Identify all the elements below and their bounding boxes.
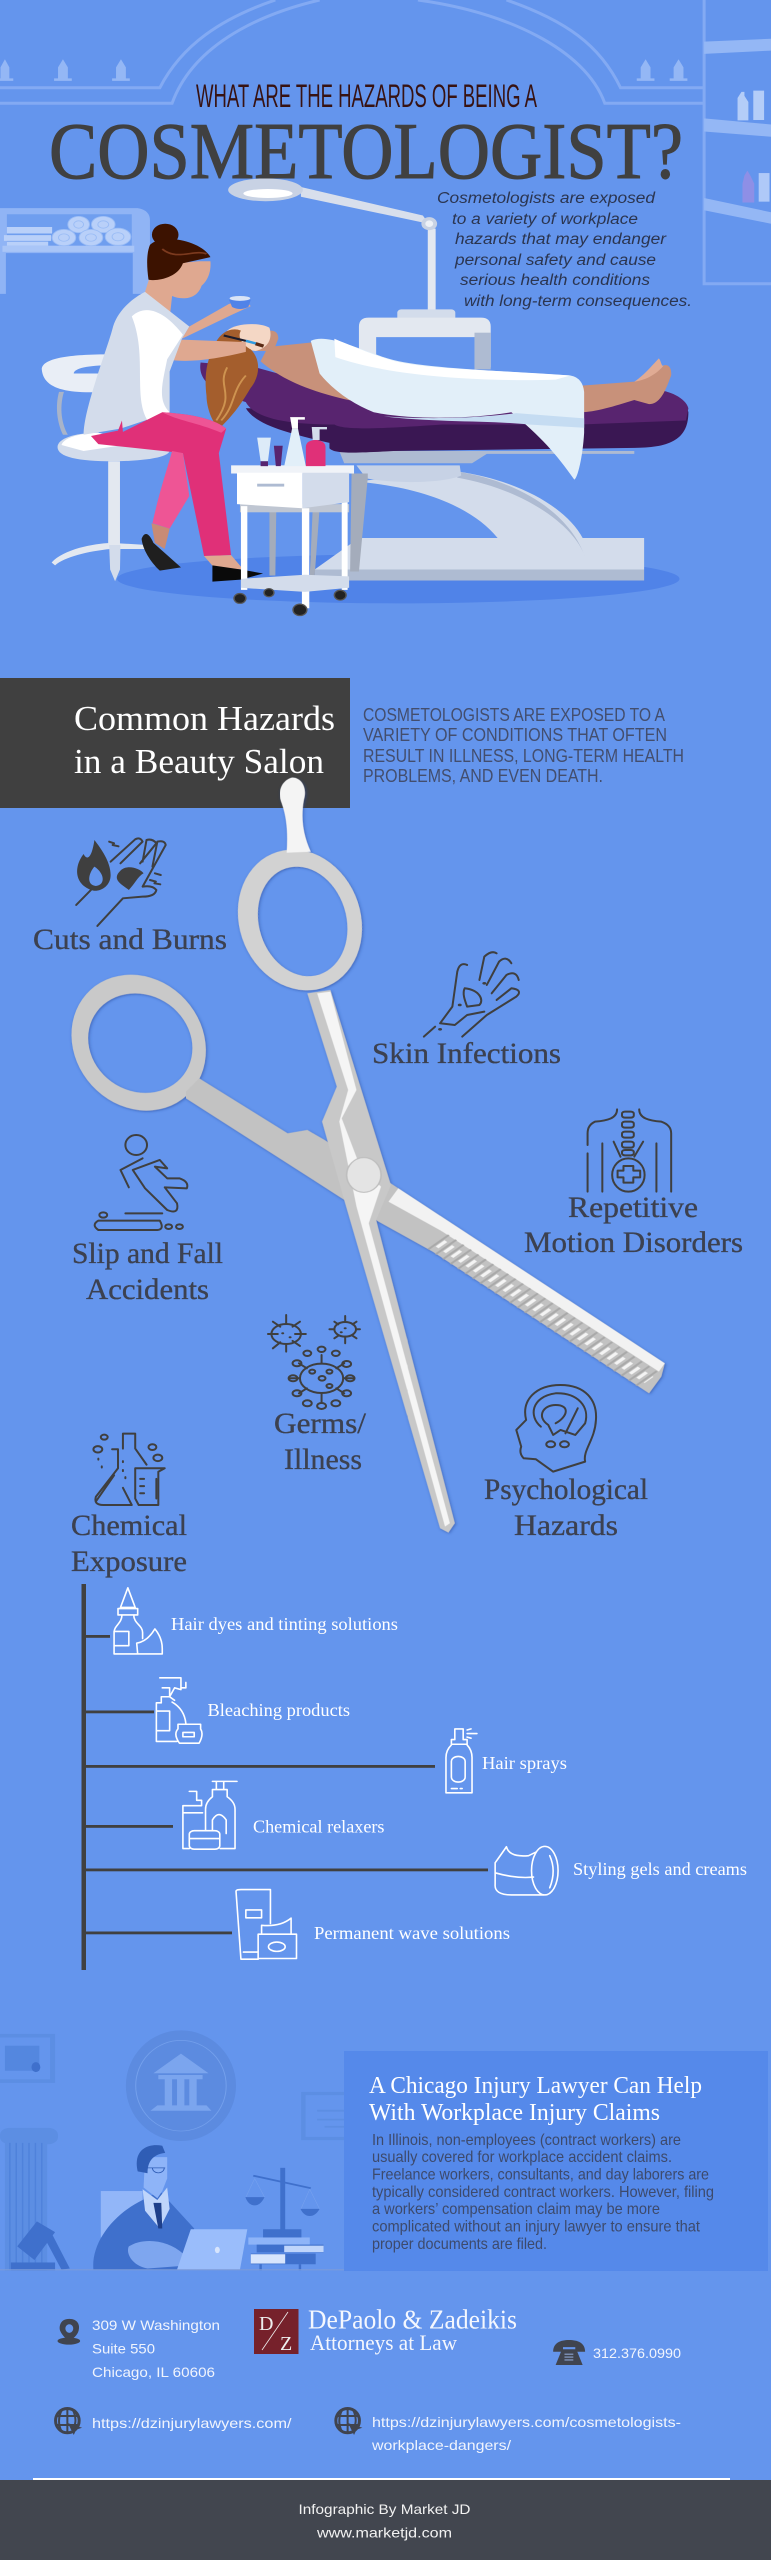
stool [42, 354, 170, 581]
label: germs and illness: Illness [284, 1443, 362, 1476]
thinning blade and ring [59, 969, 665, 1393]
label: cuts and burns: Cuts and Burns [33, 923, 227, 956]
icon: spray can [446, 1729, 477, 1793]
label: Chemical relaxers [253, 1816, 384, 1836]
hero illustration: salon scene [0, 0, 771, 616]
label: psychological hazards: Hazards [514, 1509, 618, 1542]
label: repetitive motion disorders: Motion Disorders [524, 1226, 743, 1259]
address: 309 W Washington [92, 2317, 220, 2333]
website link: https://dzinjurylawyers.com/ [92, 2415, 292, 2431]
straight blade and ring [228, 777, 455, 1533]
callout panel: injury lawyer: A Chicago Injury Lawyer Can Help [369, 2073, 702, 2099]
hazard icon: cuts and burns [76, 838, 166, 926]
intro text: Cosmetologists are exposed [437, 190, 657, 207]
label: Permanent wave solutions [314, 1923, 510, 1943]
label: skin infections: Skin Infections [372, 1037, 561, 1070]
beautician [84, 224, 263, 582]
law office background [0, 2030, 348, 2271]
section intro text: PROBLEMS, AND EVEN DEATH. [363, 766, 603, 786]
patient [206, 324, 671, 427]
label: Bleaching products [208, 1700, 350, 1720]
callout body: In Illinois, non-employees (contract workers) are [372, 2132, 681, 2149]
intro text [437, 190, 692, 310]
section heading panel: in a Beauty Salon [74, 742, 324, 781]
label: psychological hazards [484, 1473, 648, 1542]
logo: DePaolo & Zadeikis: DePaolo & Zadeikis [308, 2304, 517, 2334]
logo: DePaolo & Zadeikis: D [259, 2313, 273, 2335]
label: repetitive motion disorders: Repetitive [568, 1191, 698, 1224]
callout body: typically considered contract workers. However, filing [372, 2184, 714, 2201]
article link: https://dzinjurylawyers.com/cosmetologists- [372, 2414, 681, 2430]
scales and books [245, 2168, 324, 2270]
hazard icon: psychological head [516, 1385, 596, 1472]
intro text: with long-term consequences. [464, 293, 692, 310]
lamp [228, 178, 455, 321]
label: germs and illness [274, 1407, 367, 1476]
callout body: usually covered for workplace accident claims. [372, 2149, 672, 2166]
chemical tree lines [82, 1584, 488, 1970]
footer [0, 2480, 771, 2560]
intro text: serious health conditions [460, 272, 650, 289]
label: psychological hazards: Psychological [484, 1473, 648, 1506]
icon: pump bottles [183, 1781, 237, 1849]
main title: COSMETOLOGIST? [49, 108, 683, 196]
article link: workplace-dangers/ [371, 2437, 511, 2453]
callout panel: injury lawyer: With Workplace Injury Claims [369, 2100, 660, 2126]
icon: telephone [553, 2340, 585, 2365]
label: slip and fall accidents: Accidents [86, 1273, 209, 1306]
callout panel: injury lawyer [344, 2051, 768, 2271]
salon background architecture [0, 0, 771, 284]
label: slip and fall accidents: Slip and Fall [72, 1237, 223, 1270]
callout body [372, 2132, 714, 2253]
lawyer figure [93, 2145, 247, 2270]
icon: spray bottle and jar [156, 1678, 202, 1743]
address [92, 2317, 220, 2380]
callout body: proper documents are filed. [372, 2236, 547, 2253]
item: styling gels [495, 1846, 747, 1895]
towel drape [311, 339, 584, 480]
label: Hair sprays [482, 1753, 567, 1773]
label: Styling gels and creams [573, 1859, 747, 1879]
lawyer illustration [0, 2030, 348, 2271]
section intro text [363, 705, 684, 786]
icon: dye bottle [114, 1588, 162, 1654]
icon: tube and box [236, 1890, 296, 1959]
address: Chicago, IL 60606 [92, 2364, 215, 2380]
section intro text: COSMETOLOGISTS ARE EXPOSED TO A [363, 705, 665, 725]
icon: cream jar [495, 1846, 558, 1895]
hazard icon: repetitive motion spine [588, 1109, 671, 1192]
hazard icon: germs [268, 1315, 360, 1409]
icon: globe one [56, 2409, 82, 2435]
section heading panel: Common Hazards [74, 699, 335, 738]
label: repetitive motion disorders [524, 1191, 743, 1259]
towel rack [0, 208, 150, 294]
section heading panel [0, 678, 350, 808]
label: chemical exposure: Exposure [71, 1545, 187, 1578]
item: hair sprays [446, 1729, 567, 1793]
callout body: Freelance workers, consultants, and day laborers are [372, 2166, 709, 2184]
small heading: WHAT ARE THE HAZARDS OF BEING A [196, 78, 537, 114]
label: slip and fall accidents [72, 1237, 223, 1306]
section intro text: VARIETY OF CONDITIONS THAT OFTEN [363, 725, 667, 745]
hazard icon: chemical flasks [93, 1434, 165, 1505]
article link [371, 2414, 681, 2453]
phone number: 312.376.0990 [593, 2345, 681, 2361]
scissors [59, 777, 665, 1533]
item: chemical relaxers [183, 1781, 384, 1849]
logo: DePaolo & Zadeikis: Attorneys at Law [310, 2330, 457, 2355]
address: Suite 550 [92, 2340, 155, 2356]
label: chemical exposure [71, 1509, 187, 1578]
callout body: complicated without an injury lawyer to ensure that [372, 2218, 701, 2236]
hazard icon: skin infections [424, 952, 519, 1037]
icon: location pin [58, 2319, 80, 2345]
floor shadow [117, 554, 680, 603]
cart with bottles [231, 417, 368, 616]
item: permanent wave [236, 1890, 510, 1959]
item: bleaching [156, 1678, 350, 1743]
label: Hair dyes and tinting solutions [171, 1614, 398, 1634]
callout body: a workers’ compensation claim may be more [372, 2201, 660, 2218]
label: germs and illness: Germs/ [274, 1407, 367, 1440]
item: hair dyes [114, 1588, 398, 1654]
icon: globe two [336, 2409, 362, 2435]
intro text: hazards that may endanger [455, 231, 667, 248]
footer: www.marketjd.com [316, 2524, 452, 2540]
intro text: personal safety and cause [454, 252, 656, 269]
logo: DePaolo & Zadeikis: Z [280, 2333, 292, 2355]
label: chemical exposure: Chemical [71, 1509, 187, 1542]
logo: DePaolo & Zadeikis [254, 2304, 517, 2355]
hazard icon: slip and fall [95, 1135, 187, 1230]
section intro text: RESULT IN ILLNESS, LONG-TERM HEALTH [363, 746, 684, 766]
treatment chair [200, 318, 688, 580]
intro text: to a variety of workplace [452, 211, 638, 228]
footer: Infographic By Market JD [298, 2501, 470, 2517]
